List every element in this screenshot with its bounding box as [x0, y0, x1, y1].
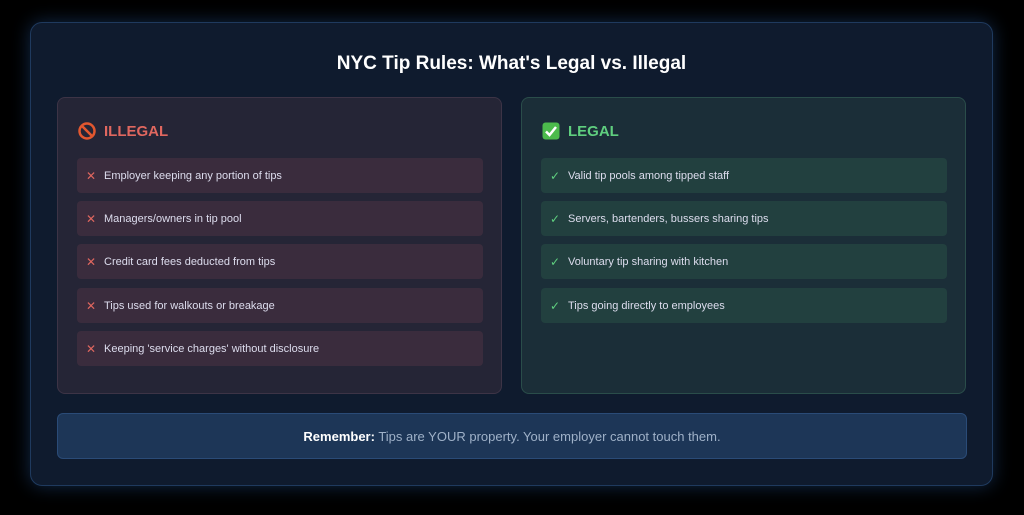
item: ✓: [550, 212, 560, 226]
item: Credit card fees deducted from tips: [104, 256, 275, 268]
item: Keeping 'service charges' without disclosure: [104, 342, 319, 354]
item: ✕: [86, 298, 96, 312]
reminder bar: [57, 413, 967, 459]
heading: legal: [542, 122, 619, 140]
item: Managers/owners in tip pool: [104, 212, 242, 224]
item: [77, 201, 483, 236]
item: [77, 244, 483, 279]
item: ✕: [86, 168, 96, 182]
item: [541, 158, 947, 193]
item: [77, 288, 483, 323]
item: ✓: [550, 168, 560, 182]
item: Valid tip pools among tipped staff: [568, 170, 729, 182]
item: ✕: [86, 254, 96, 268]
reminder bar: Remember: Tips are YOUR property. Your employer cannot touch them.: [303, 428, 721, 444]
item: Employer keeping any portion of tips: [104, 170, 282, 182]
item: [77, 158, 483, 193]
heading: illegal: ILLEGAL: [104, 122, 168, 140]
item: ✕: [86, 342, 96, 356]
item: Voluntary tip sharing with kitchen: [568, 256, 728, 268]
item: [541, 244, 947, 279]
heading: illegal: [78, 122, 168, 140]
item: [541, 288, 947, 323]
item: ✕: [86, 212, 96, 226]
item: ✓: [550, 254, 560, 268]
item: [77, 331, 483, 366]
item: Tips used for walkouts or breakage: [104, 300, 275, 312]
item: [541, 201, 947, 236]
item: ✓: [550, 298, 560, 312]
heading: legal: LEGAL: [568, 122, 619, 140]
item: Tips going directly to employees: [568, 300, 725, 312]
panel: legal: [521, 97, 966, 394]
item: Servers, bartenders, bussers sharing tips: [568, 212, 769, 224]
panel: illegal: [57, 97, 502, 394]
title: NYC Tip Rules: What's Legal vs. Illegal: [337, 53, 686, 74]
